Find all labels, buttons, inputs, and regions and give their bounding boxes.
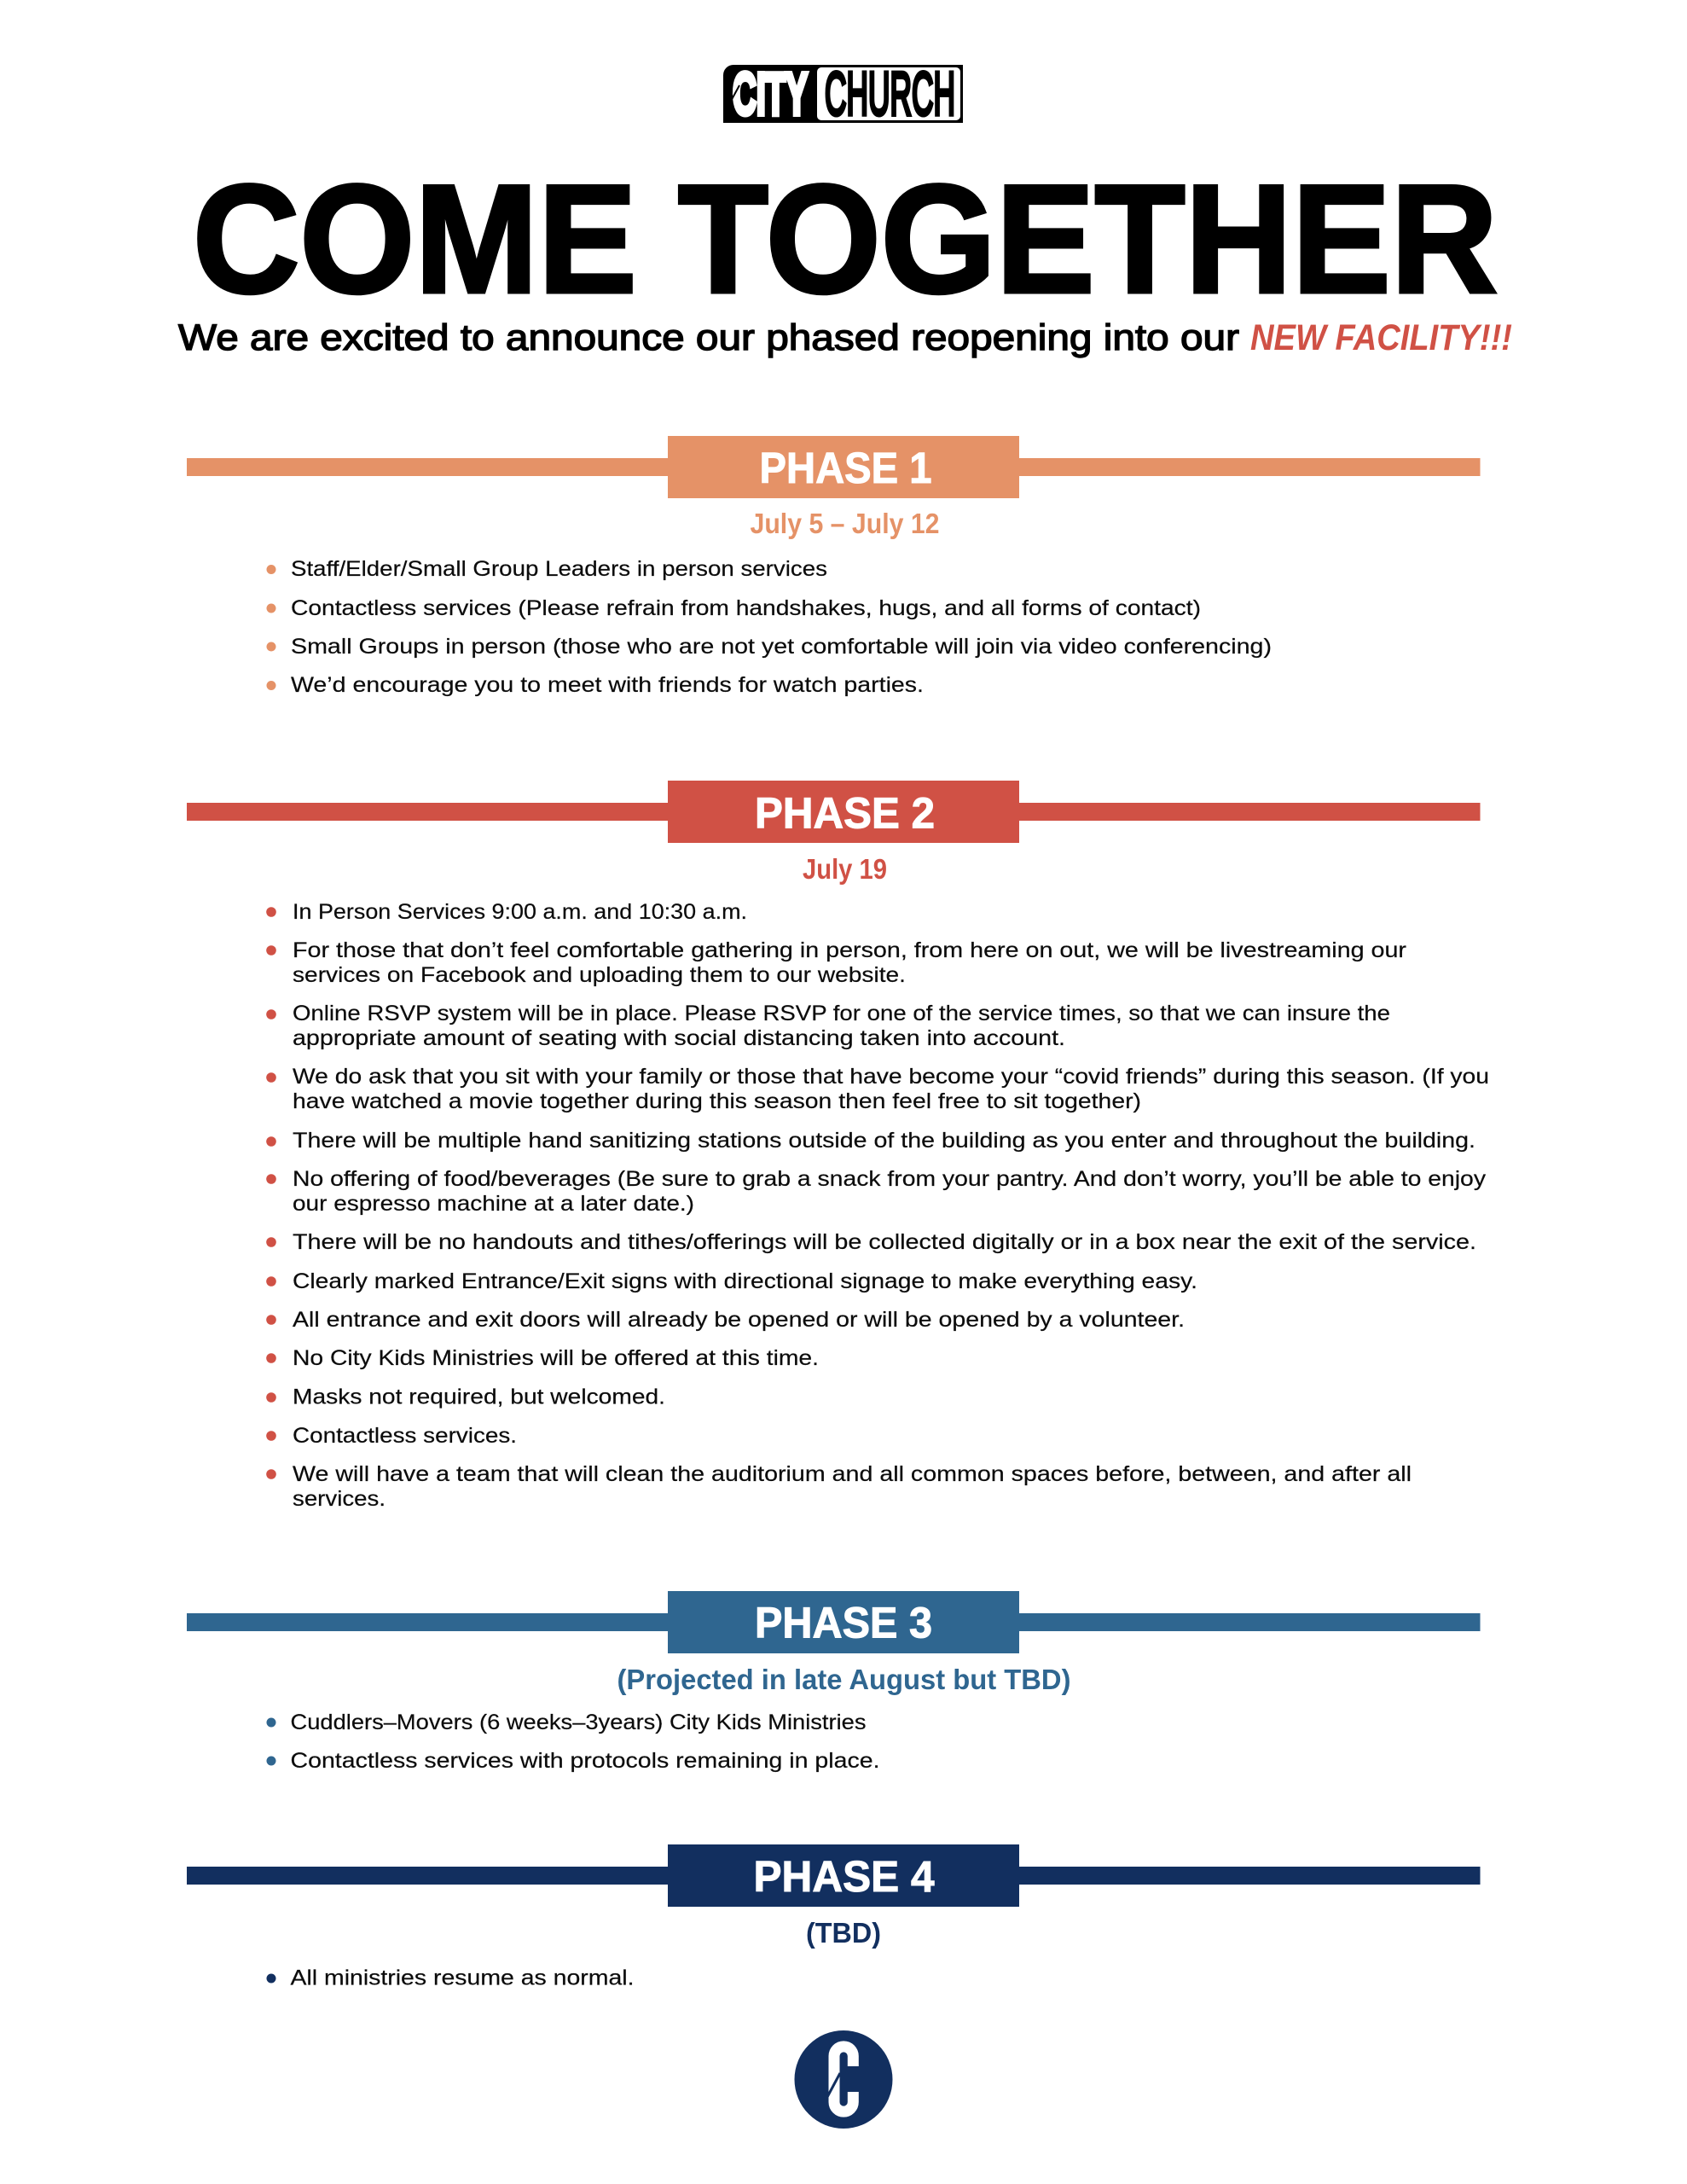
- phase 1 banner: [187, 436, 1481, 498]
- phase 2 list: No City Kids Ministries will be offered at this time.: [293, 1346, 819, 1370]
- phase 4 banner: [187, 1844, 1481, 1907]
- logo: City Church wordmark: CHURCH: [825, 61, 955, 128]
- phase 2 banner: PHASE 2: [755, 788, 935, 838]
- phase 3 banner: PHASE 3: [755, 1599, 932, 1647]
- phase 2 list: Masks not required, but welcomed.: [293, 1385, 665, 1409]
- phase 1 list: Small Groups in person (those who are not yet comfortable will join via video conferencing): [291, 635, 1272, 659]
- phase 1 list: Staff/Elder/Small Group Leaders in person services: [291, 557, 827, 581]
- phase 2 list: Clearly marked Entrance/Exit signs with directional signage to make everything easy.: [293, 1269, 1197, 1293]
- phase 2 date: July 19: [803, 853, 887, 885]
- phase 1 banner: PHASE 1: [759, 444, 931, 492]
- phase 2 list: services.: [293, 1487, 386, 1511]
- phase 1 list: [266, 557, 1272, 697]
- phase 4 list: All ministries resume as normal.: [290, 1966, 635, 1989]
- phase 3 list: [266, 1711, 880, 1773]
- phase 2 list: There will be no handouts and tithes/offerings will be collected digitally or in a box near the exit of the service.: [293, 1230, 1476, 1254]
- phase 2 list: For those that don’t feel comfortable gathering in person, from here on out, we will be livestreaming our: [293, 938, 1406, 962]
- panel: phase 1: [187, 436, 1481, 697]
- logo: City Church wordmark: CITY: [733, 61, 808, 127]
- phase 2 list: our espresso machine at a later date.): [293, 1192, 694, 1216]
- subtitle: We are excited to announce our phased reopening into our: [178, 317, 1239, 358]
- panel: phase 4: [187, 1844, 1481, 1989]
- phase 1 list: Contactless services (Please refrain from handshakes, hugs, and all forms of contact): [291, 596, 1201, 620]
- phase 2 list: In Person Services 9:00 a.m. and 10:30 a.m.: [293, 900, 747, 924]
- phase 3 banner: [187, 1591, 1481, 1653]
- phase 2 list: services on Facebook and uploading them to our website.: [293, 963, 906, 987]
- phase 2 list: Online RSVP system will be in place. Please RSVP for one of the service times, so that we can insure the: [293, 1002, 1390, 1025]
- phase 2 list: Contactless services.: [293, 1424, 517, 1448]
- phase 4 date: (TBD): [806, 1917, 881, 1949]
- phase 2 list: We do ask that you sit with your family or those that have become your “covid friends” during this season. (If you: [293, 1065, 1489, 1089]
- phase 2 list: All entrance and exit doors will already be opened or will be opened by a volunteer.: [293, 1308, 1185, 1332]
- icon: City Church circular mark: [795, 2030, 892, 2129]
- phase 3 list: Contactless services with protocols remaining in place.: [290, 1749, 880, 1773]
- phase 2 list: have watched a movie together during this season then feel free to sit together): [293, 1089, 1141, 1113]
- phase 2 banner: [187, 781, 1481, 843]
- phase 2 list: [266, 900, 1489, 1511]
- phase 2 list: We will have a team that will clean the auditorium and all common spaces before, between, and after all: [293, 1462, 1412, 1486]
- phase 4 banner: PHASE 4: [754, 1852, 935, 1901]
- phase 2 list: No offering of food/beverages (Be sure to grab a snack from your pantry. And don’t worry, you’ll be able to enjoy: [293, 1167, 1487, 1191]
- phase 1 dates: July 5 – July 12: [751, 508, 940, 539]
- phase 2 list: appropriate amount of seating with social distancing taken into account.: [293, 1026, 1065, 1050]
- subtitle: NEW FACILITY!!!: [1250, 317, 1512, 358]
- phase 3 date: (Projected in late August but TBD): [617, 1664, 1071, 1695]
- phase 2 list: There will be multiple hand sanitizing stations outside of the building as you enter and throughout the building.: [293, 1129, 1475, 1153]
- phase 1 list: We’d encourage you to meet with friends for watch parties.: [291, 673, 924, 697]
- panel: phase 2: [187, 781, 1489, 1511]
- logo: City Church wordmark: [723, 61, 963, 128]
- panel: phase 3: [187, 1591, 1481, 1773]
- title: COME TOGETHER: [193, 154, 1498, 326]
- phase 3 list: Cuddlers–Movers (6 weeks–3years) City Kids Ministries: [290, 1711, 867, 1734]
